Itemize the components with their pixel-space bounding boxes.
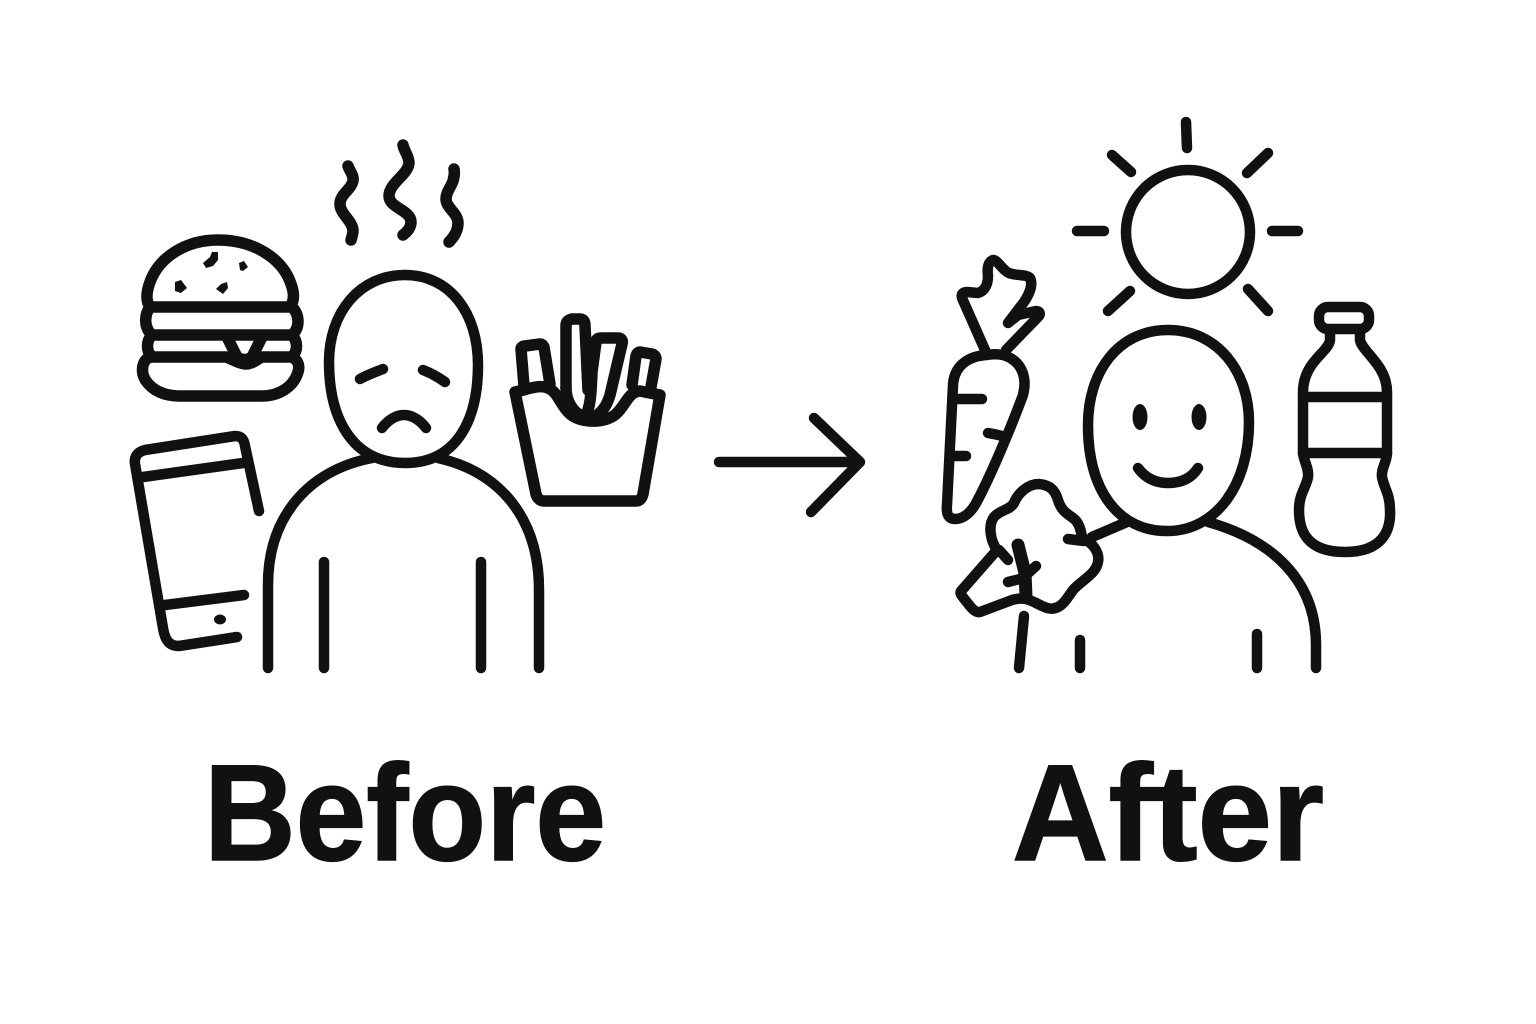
icon: fries [515,319,660,501]
icon: sad face head [329,275,478,463]
icon: burger [143,240,299,396]
panel: after [947,122,1390,668]
icon: stink lines [340,145,458,242]
panel: before [135,145,660,668]
arrow [719,418,860,512]
icon: before body [268,458,539,668]
icon: broccoli in hand [960,484,1098,612]
icon: after body [1019,522,1316,668]
burger seeds [175,252,248,294]
icon: carrot [947,260,1040,519]
icon: sun [1077,122,1298,311]
icon: water bottle [1299,307,1390,552]
icon: happy face head [1088,330,1249,531]
label: after: After [1012,737,1324,890]
label: before: Before [204,737,606,890]
icon: smartphone [135,436,259,646]
